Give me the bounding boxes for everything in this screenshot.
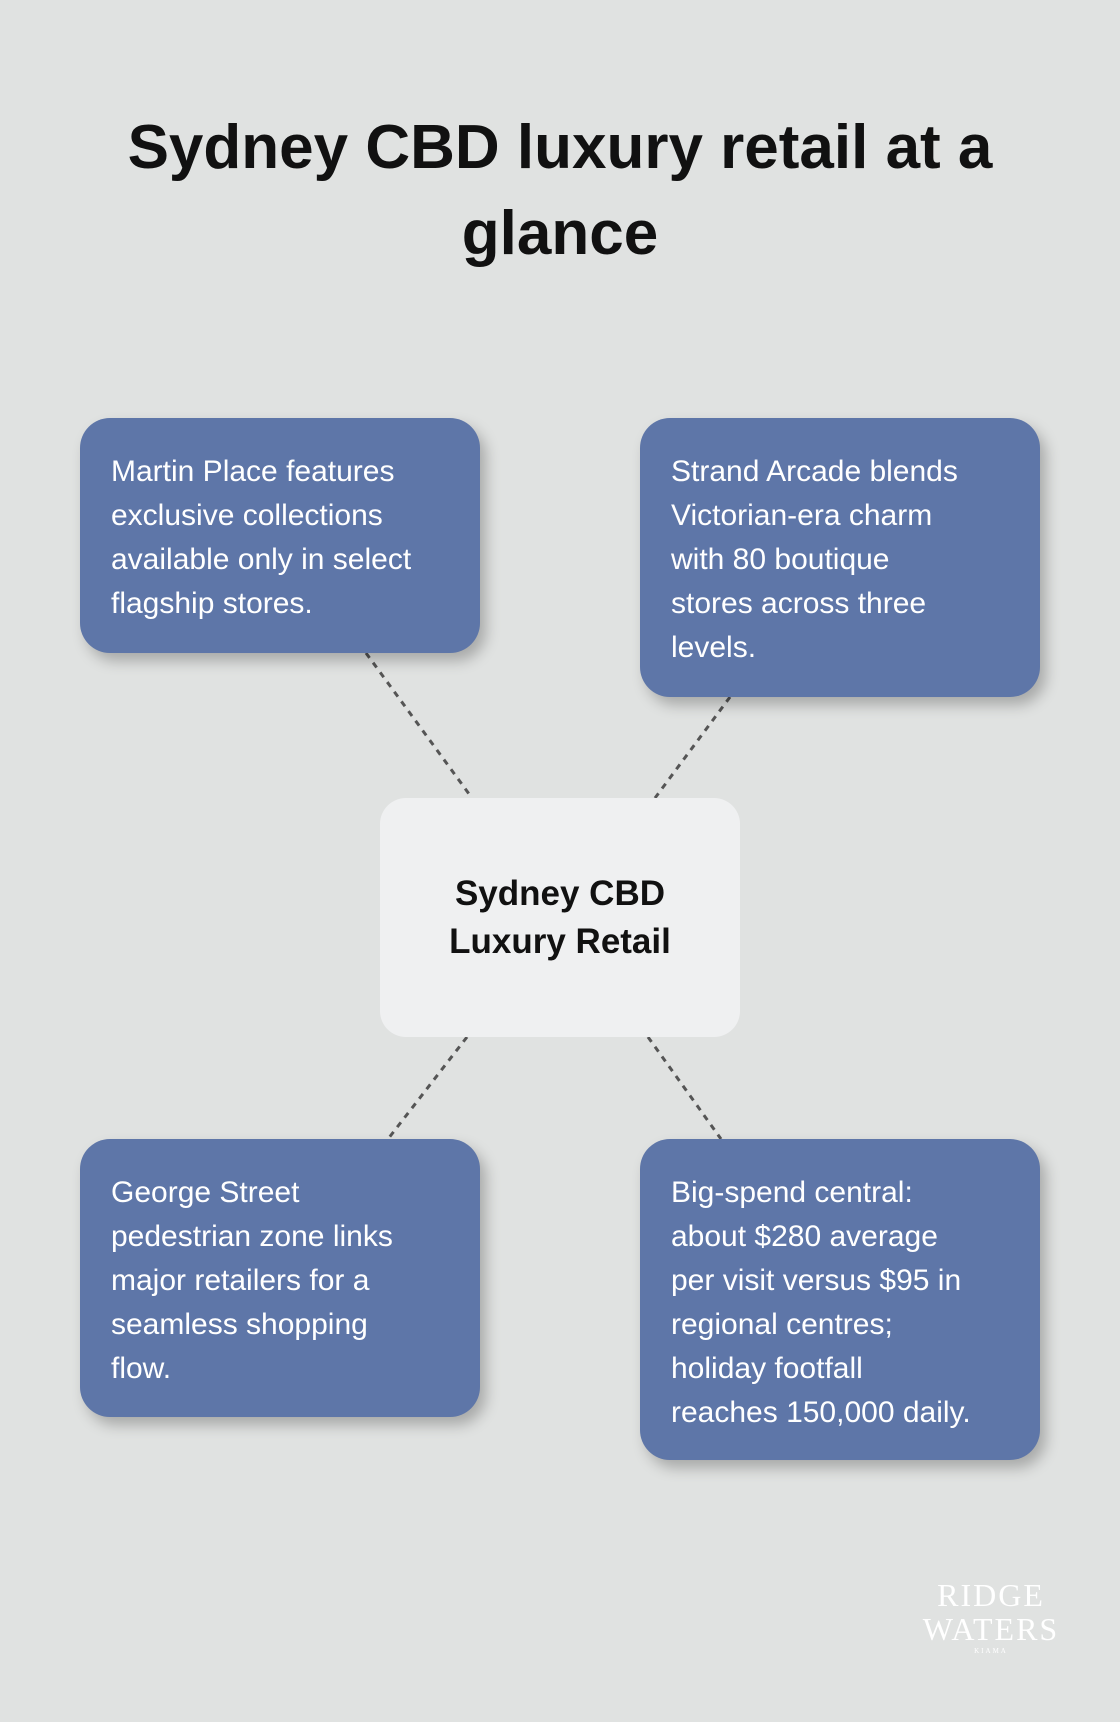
title: [128, 113, 993, 268]
panel: Martin Place: flagship stores.: [111, 587, 313, 620]
panel: Strand Arcade: Victorian-era charm: [671, 499, 932, 532]
panel: Strand Arcade: levels.: [671, 631, 756, 664]
center node: [380, 798, 740, 1037]
panel: George Street: major retailers for a: [111, 1264, 369, 1297]
panel: Strand Arcade: [640, 418, 1040, 697]
panel: George Street: flow.: [111, 1352, 171, 1385]
title: Sydney CBD luxury retail at a: [128, 113, 992, 182]
panel: Strand Arcade: Strand Arcade blends: [671, 455, 958, 488]
panel: Martin Place: exclusive collections: [111, 499, 383, 532]
panel: Big-spend: regional centres;: [671, 1308, 893, 1341]
panel: Martin Place: available only in select: [111, 543, 411, 576]
panel: Big-spend: about $280 average: [671, 1220, 938, 1253]
title: glance: [462, 199, 658, 268]
panel: Big-spend: holiday footfall: [671, 1352, 863, 1385]
panel: Strand Arcade: with 80 boutique: [671, 543, 890, 576]
panel: Big-spend: per visit versus $95 in: [671, 1264, 961, 1297]
panel: Strand Arcade: stores across three: [671, 587, 926, 620]
center node: Sydney CBD: [455, 874, 665, 912]
logo: [922, 1577, 1059, 1655]
panel: Martin Place: [80, 418, 480, 653]
panel: George Street: seamless shopping: [111, 1308, 368, 1341]
panel: George Street: [80, 1139, 480, 1417]
logo: KIAMA: [974, 1647, 1008, 1655]
panel: Big-spend: Big-spend central:: [671, 1176, 913, 1209]
panel: Big-spend: [640, 1139, 1040, 1460]
panel: George Street: pedestrian zone links: [111, 1220, 393, 1253]
center node: Luxury Retail: [449, 922, 671, 960]
logo: WATERS: [923, 1611, 1059, 1647]
logo: RIDGE: [937, 1577, 1045, 1613]
panel: George Street: George Street: [111, 1176, 299, 1209]
panel: Martin Place: Martin Place features: [111, 455, 394, 488]
panel: Big-spend: reaches 150,000 daily.: [671, 1396, 971, 1429]
